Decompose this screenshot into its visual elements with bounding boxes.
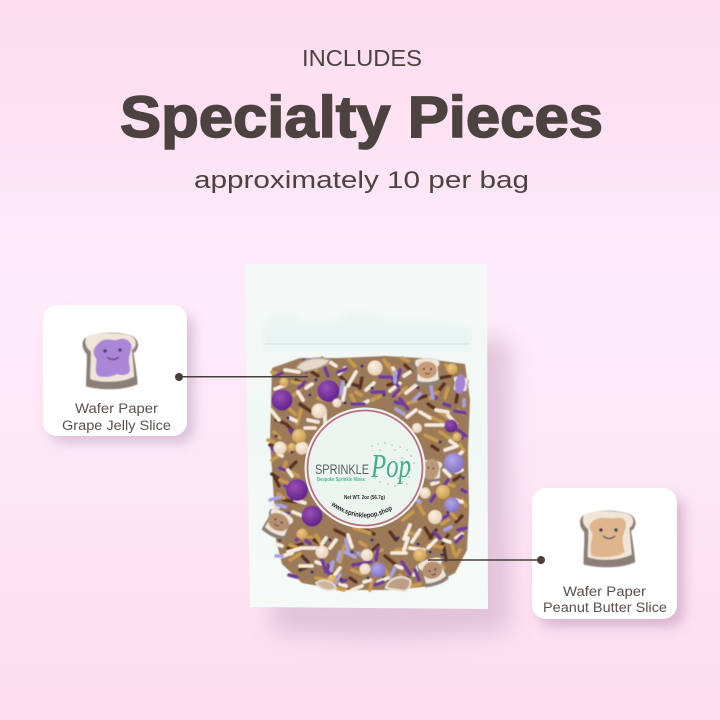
- url: www.sprinklepop.shop: [332, 502, 392, 519]
- cream balls: [274, 360, 442, 574]
- eyebrow: includes: INCLUDES: [302, 45, 422, 71]
- sprinkle mix: [259, 356, 470, 591]
- toast: top pale: [296, 358, 330, 372]
- bag top sheen: [262, 311, 470, 345]
- bag body: [245, 264, 488, 609]
- card label: [62, 401, 171, 433]
- icon: grape jelly toast: [83, 333, 138, 389]
- connector: grape jelly to bag: [175, 373, 308, 381]
- card label: [543, 584, 667, 615]
- callout: grape jelly slice: [43, 305, 194, 443]
- card shadow: [539, 497, 684, 627]
- toast: left peanut butter: [259, 506, 296, 542]
- product bag: [245, 264, 488, 609]
- bag shadow: [272, 340, 510, 638]
- big dark purple balls: [272, 380, 458, 526]
- card: [532, 488, 677, 619]
- gold balls: [280, 364, 462, 584]
- toast: top right grape: [451, 373, 470, 395]
- subtitle: approximately 10 per bag: [194, 167, 529, 194]
- toast: bottom small: [386, 577, 411, 591]
- darker brown rods: [270, 365, 462, 588]
- logo tagline: Bespoke Sprinkle Mixes: [317, 477, 365, 483]
- heading block: [120, 45, 603, 194]
- sprinkle dots: [372, 443, 414, 486]
- zip seal: [262, 328, 472, 352]
- title: Specialty Pieces: [120, 85, 603, 150]
- card label: Wafer Paper: [75, 401, 159, 416]
- connector: peanut butter to bag: [428, 556, 545, 564]
- mix base: [270, 356, 470, 590]
- logo script: Pop: [370, 448, 411, 485]
- toast: right peanut butter: [420, 457, 444, 483]
- card label: Wafer Paper: [563, 584, 647, 599]
- cream rods: [271, 362, 462, 590]
- card label: Peanut Butter Slice: [543, 600, 667, 615]
- lavender balls: [370, 453, 464, 578]
- net weight: Net WT. 2oz (56.7g): [344, 495, 385, 501]
- logo wordmark: SPRINKLE: [315, 461, 369, 477]
- purple rods: [272, 360, 466, 587]
- toast: bottom left small: [316, 580, 336, 590]
- callout: peanut butter slice: [532, 488, 684, 627]
- card label: Grape Jelly Slice: [62, 418, 171, 433]
- brand label: [304, 408, 426, 528]
- toast: bottom peanut butter: [416, 555, 450, 589]
- toast: top peanut butter: [414, 358, 441, 386]
- lavender rods: [270, 372, 464, 585]
- icon: peanut butter toast: [580, 511, 636, 567]
- small sugar beads: [276, 366, 463, 585]
- gold rods: [268, 358, 466, 590]
- card shadow: [50, 314, 194, 443]
- label disc: [304, 408, 426, 528]
- card: [43, 305, 187, 436]
- wafer toast pieces: [259, 358, 470, 591]
